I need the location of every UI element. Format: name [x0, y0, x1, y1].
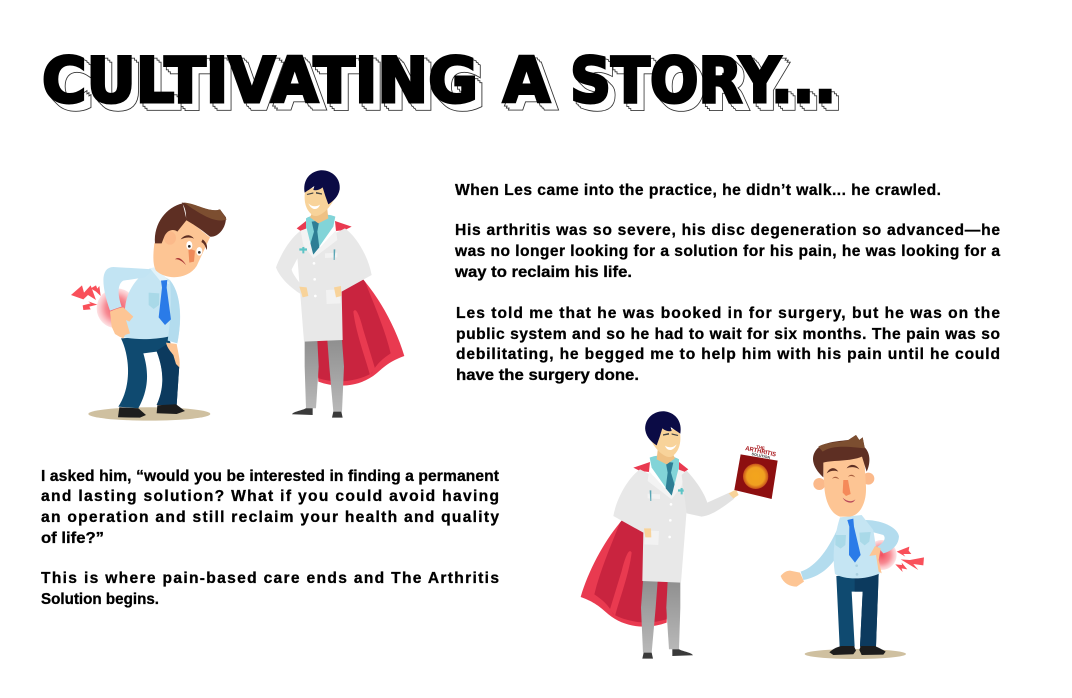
title: A: [510, 51, 557, 124]
text block: top story: debilitating, he begged me to help him with his pain until he could: [456, 346, 1000, 363]
text block: top story: [454, 182, 1000, 384]
title: A: [506, 47, 553, 120]
title: A: [503, 44, 550, 117]
text block: top story: way to reclaim his life.: [454, 264, 632, 281]
title: CULTIVATING: [47, 49, 483, 122]
title: A: [508, 49, 555, 122]
title: CULTIVATING: [47, 49, 483, 122]
title: STORY...: [575, 49, 841, 122]
text block: bottom story: This is where pain-based care ends and The Arthritis: [41, 570, 499, 587]
title: A: [508, 49, 555, 122]
text block: top story: have the surgery done.: [456, 367, 639, 384]
title: [42, 44, 843, 124]
text block: top story: Les told me that he was booked in for surgery, but he was on the: [456, 305, 1000, 322]
title: STORY...: [573, 47, 839, 120]
illustration: superhero doctor with hands on hips: [276, 170, 404, 418]
title: STORY...: [577, 51, 843, 124]
text block: bottom story: I asked him, “would you be interested in finding a permanent: [41, 468, 499, 485]
illustration: superhero doctor holding book: [581, 411, 778, 659]
title: STORY...: [570, 44, 836, 117]
title: CULTIVATING: [42, 44, 478, 117]
text block: bottom story: Solution begins.: [41, 591, 159, 608]
book: The Arthritis Solution: SOLUTION: [751, 452, 771, 460]
text block: bottom story: and lasting solution? What if you could avoid having: [41, 488, 499, 505]
text block: top story: public system and so he had to wait for six months. The pain was so: [456, 326, 1000, 343]
book: The Arthritis Solution: ARTHRITIS: [745, 445, 777, 458]
illustration: relieved man with hand on back: [781, 435, 924, 659]
text block: top story: was no longer looking for a solution for his pain, he was looking for a: [454, 243, 1000, 260]
title: CULTIVATING: [49, 51, 485, 124]
title: STORY...: [577, 51, 843, 124]
text block: bottom story: [41, 468, 499, 608]
book: The Arthritis Solution: [734, 442, 778, 499]
title: CULTIVATING: [45, 47, 481, 120]
title: STORY...: [575, 49, 841, 122]
text block: top story: His arthritis was so severe, his disc degeneration so advanced—he: [455, 222, 1000, 239]
title: CULTIVATING: [45, 47, 481, 120]
text block: bottom story: an operation and still reclaim your health and quality: [41, 509, 499, 526]
book: The Arthritis Solution: THE: [756, 444, 765, 451]
title: A: [506, 47, 553, 120]
title: A: [510, 51, 557, 124]
text block: top story: When Les came into the practice, he didn’t walk... he crawled.: [455, 182, 941, 199]
illustration: man with back pain: [71, 203, 227, 421]
title: STORY...: [573, 47, 839, 120]
text block: bottom story: of life?”: [41, 530, 104, 547]
title: CULTIVATING: [49, 51, 485, 124]
